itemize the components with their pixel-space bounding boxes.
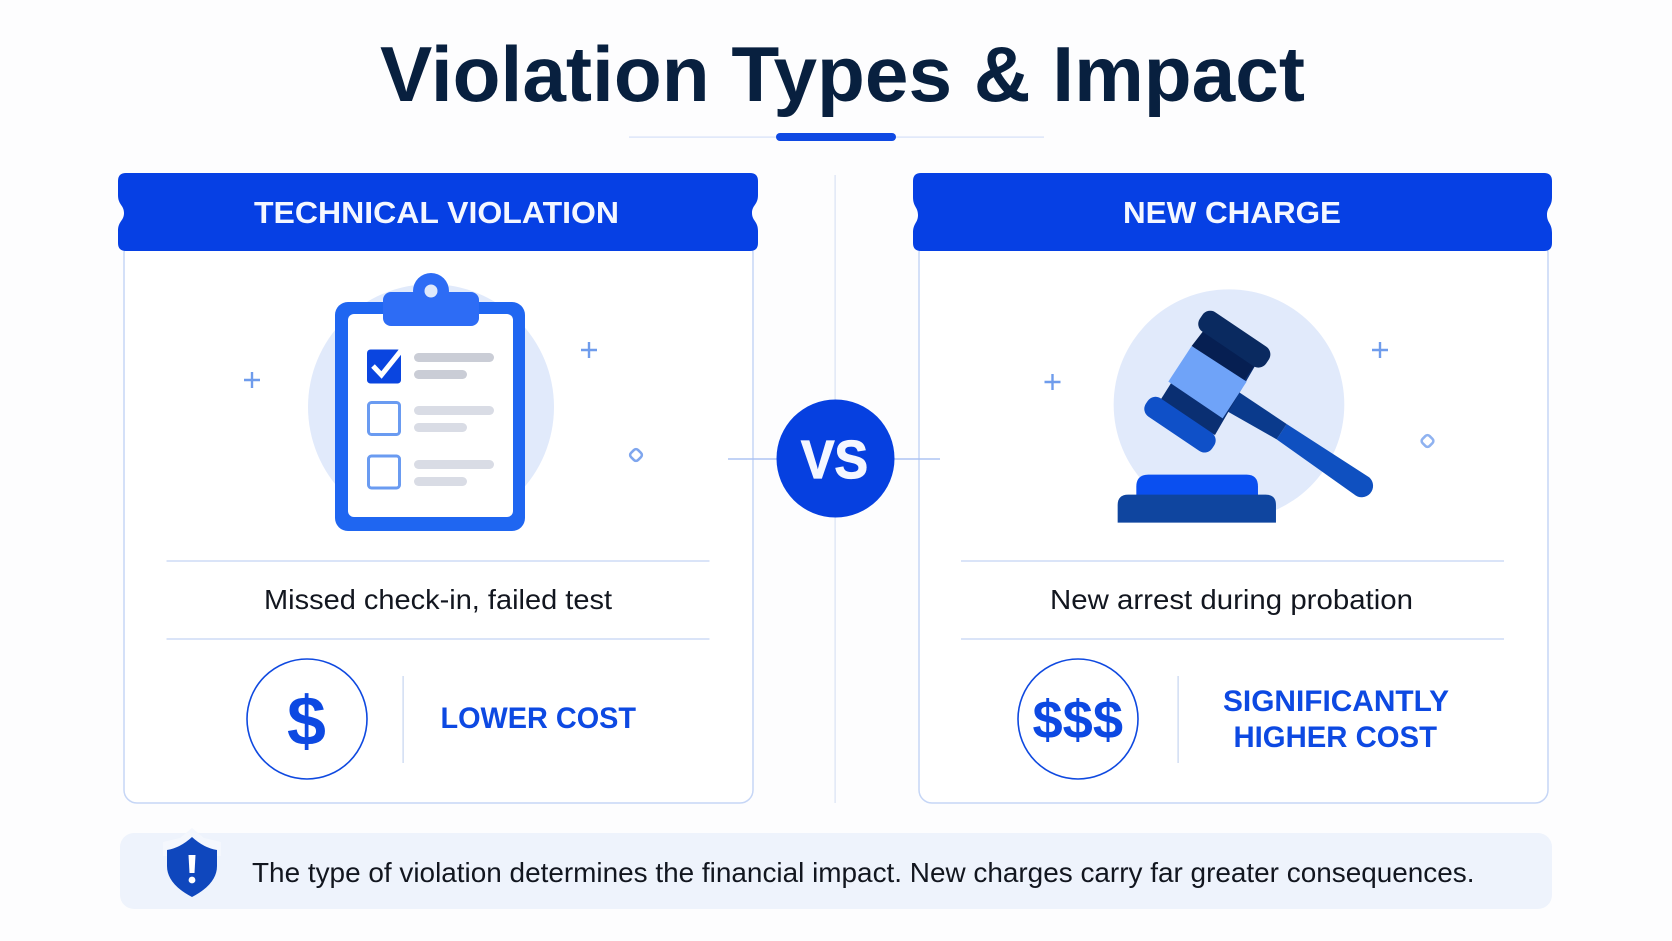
- card outline: [124, 240, 753, 803]
- vs badge: VS: [801, 430, 868, 490]
- panel: technical violation: [118, 173, 758, 803]
- icon: single dollar: [247, 659, 367, 779]
- icon: gavel: [1114, 289, 1373, 523]
- header banner: [118, 173, 758, 251]
- vertical divider: [1178, 676, 1179, 763]
- description: New arrest during probation: [1050, 584, 1413, 615]
- title underline: [629, 133, 1044, 141]
- icon: single dollar: $: [287, 682, 326, 760]
- description: Missed check-in, failed test: [264, 584, 612, 615]
- vertical divider: [402, 676, 404, 763]
- divider lines: [961, 560, 1504, 640]
- cost label: SIGNIFICANTLY: [1223, 685, 1449, 718]
- card outline: [919, 240, 1548, 803]
- cost label: LOWER COST: [440, 702, 636, 735]
- icon: shield alert: [163, 828, 221, 897]
- icon: triple dollar: $$$: [1032, 690, 1123, 750]
- icon: triple dollar: [1018, 659, 1138, 779]
- panel: new charge: [913, 173, 1552, 803]
- callout text: The type of violation determines the financial impact. New charges carry far greater consequences.: [252, 857, 1474, 888]
- sparkles: [1044, 342, 1435, 448]
- title: Violation Types & Impact: [380, 30, 1305, 118]
- divider lines: [166, 560, 710, 640]
- heading: TECHNICAL VIOLATION: [254, 196, 619, 230]
- heading: NEW CHARGE: [1123, 196, 1341, 230]
- cost label: [1223, 685, 1449, 754]
- center divider line: [834, 175, 836, 803]
- sparkles: [244, 342, 643, 462]
- callout: takeaway bar: [120, 828, 1552, 909]
- header banner: [913, 173, 1552, 251]
- cost label: HIGHER COST: [1234, 721, 1437, 754]
- icon: clipboard checklist: [308, 273, 554, 531]
- vs badge: [728, 400, 940, 518]
